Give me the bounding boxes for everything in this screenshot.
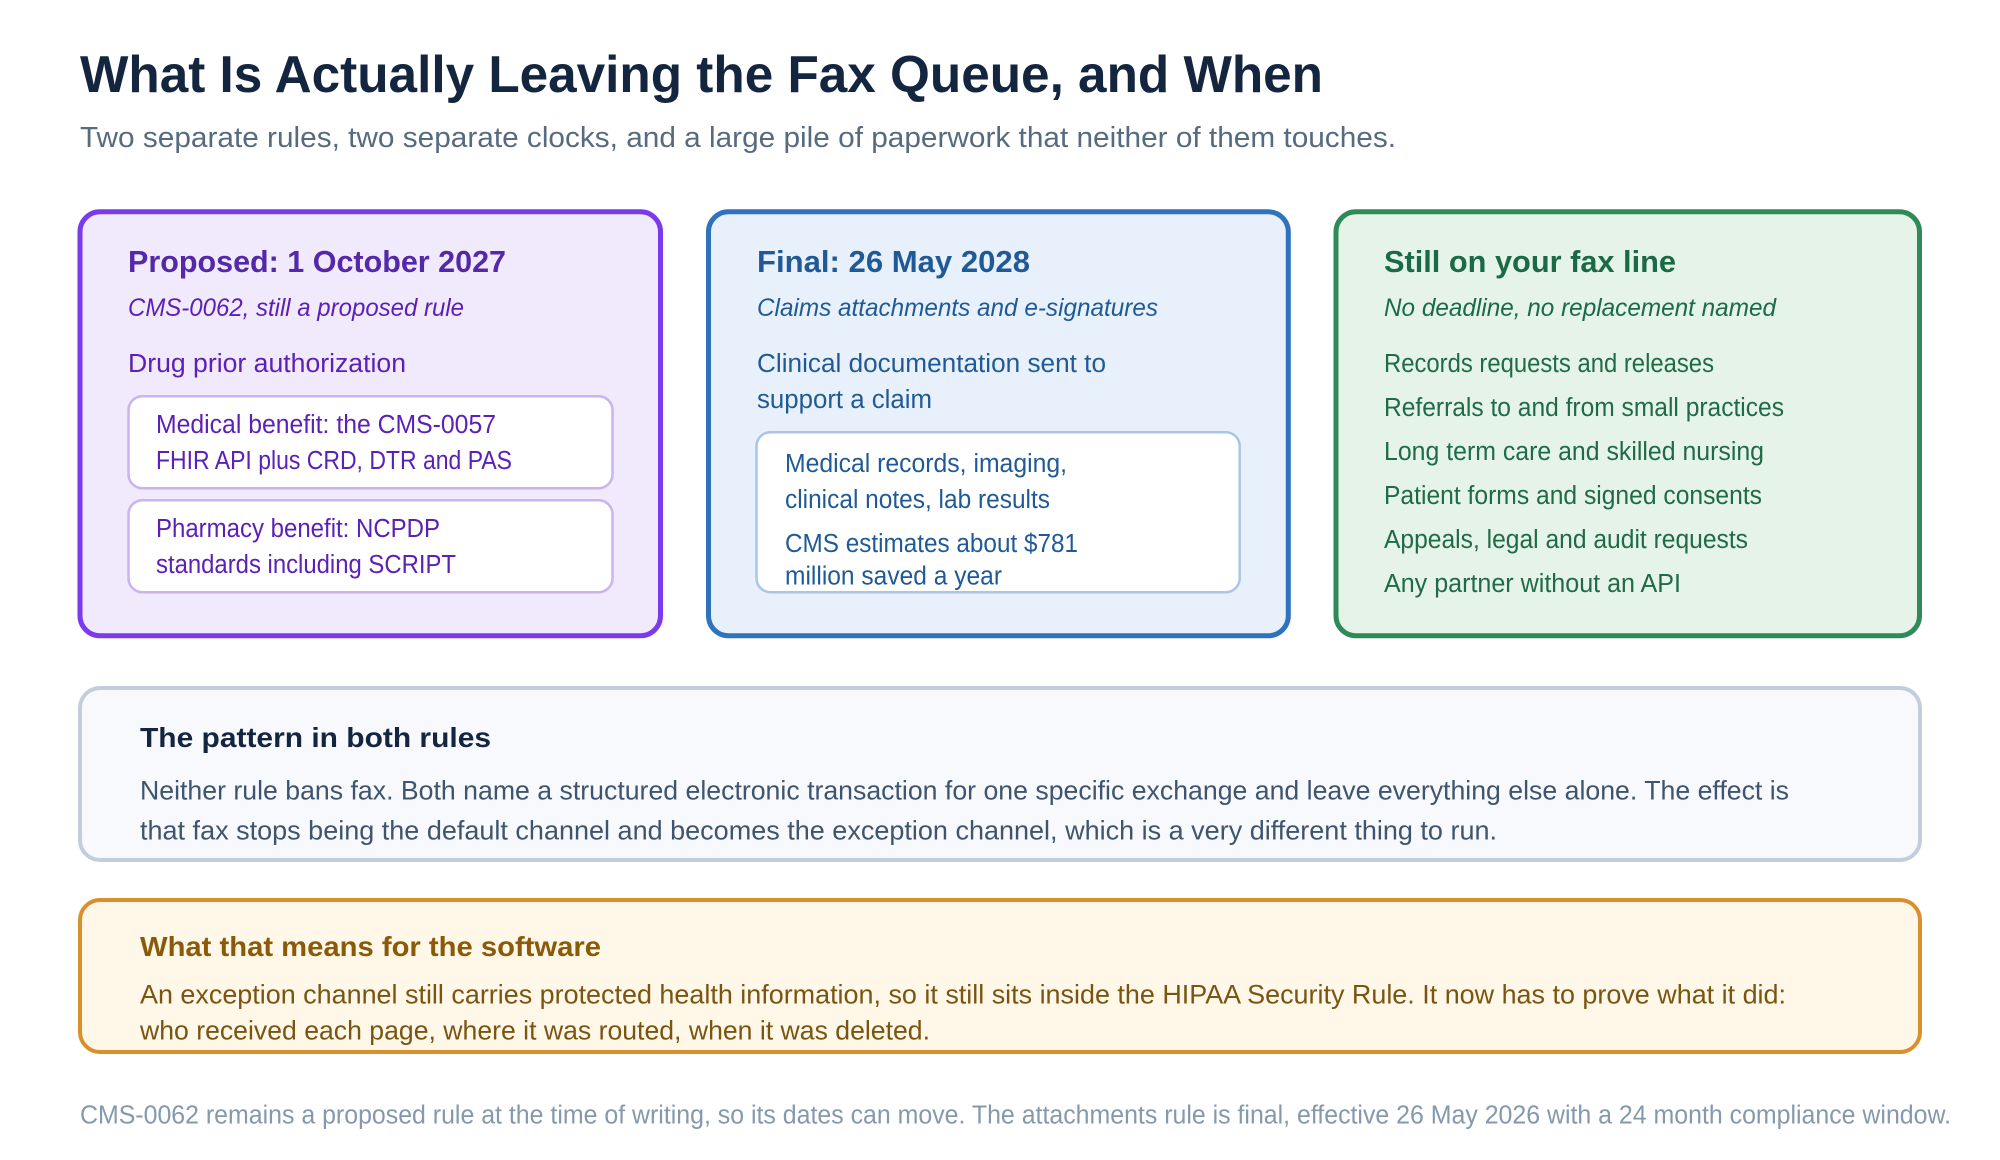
footnote: CMS-0062 remains a proposed rule at the time of writing, so its dates can move. The attachments rule is final, effective 26 May 2026 with a 24 month compliance window. <box>80 1102 1951 1130</box>
subtitle: Two separate rules, two separate clocks, and a large pile of paperwork that neither of them touches. <box>80 122 1396 154</box>
text: scope: Drug prior authorization <box>128 350 406 378</box>
box: medical benefit <box>128 396 612 488</box>
text: software body: An exception channel still carries protected health information, so it still sits inside the HIPAA Security Rule. It now has to prove what it did: <box>140 980 1786 1010</box>
list: remaining fax uses: Referrals to and from small practices <box>1384 394 1784 422</box>
panel: still on fax <box>1336 212 1920 636</box>
box: records and savings: CMS estimates about $781 <box>785 530 1078 558</box>
list: remaining fax uses <box>1384 350 1784 598</box>
subheading: no deadline: No deadline, no replacement named <box>1384 294 1777 322</box>
box: medical benefit: FHIR API plus CRD, DTR and PAS <box>156 447 512 475</box>
subheading: final rule: Claims attachments and e-signatures <box>757 294 1158 322</box>
box: pharmacy benefit: standards including SCRIPT <box>156 551 456 579</box>
text: pattern body: Neither rule bans fax. Both name a structured electronic transaction for one specific exchange and leave everything else alone. The effect is <box>140 776 1789 806</box>
heading: final date: Final: 26 May 2028 <box>757 245 1030 279</box>
box: records and savings <box>756 432 1240 592</box>
list: remaining fax uses: Records requests and releases <box>1384 350 1714 378</box>
heading: still on fax: Still on your fax line <box>1384 245 1676 279</box>
panel: what that means for the software <box>80 900 1920 1052</box>
box: pharmacy benefit: Pharmacy benefit: NCPDP <box>156 515 440 543</box>
box: records and savings: clinical notes, lab results <box>785 486 1050 514</box>
list: remaining fax uses: Any partner without an API <box>1384 570 1681 598</box>
text: pattern body <box>140 776 1789 846</box>
text: final scope: Clinical documentation sent to <box>757 350 1106 378</box>
text: final scope: support a claim <box>757 386 932 414</box>
panel: proposed rule <box>80 212 660 636</box>
text: final scope <box>757 350 1106 414</box>
box: pharmacy benefit <box>128 500 612 592</box>
list: remaining fax uses: Patient forms and signed consents <box>1384 482 1762 510</box>
text: software body: who received each page, where it was routed, when it was deleted. <box>139 1016 930 1046</box>
list: remaining fax uses: Long term care and skilled nursing <box>1384 438 1764 466</box>
heading: proposed date: Proposed: 1 October 2027 <box>128 245 506 279</box>
text: pattern body: that fax stops being the default channel and becomes the exception channel, which is a very different thing to run. <box>140 816 1497 846</box>
text: software body <box>139 980 1786 1046</box>
heading: software: What that means for the software <box>140 931 601 962</box>
subheading: proposed rule: CMS-0062, still a proposed rule <box>128 294 464 322</box>
panel: final rule <box>708 212 1288 636</box>
box: records and savings: Medical records, imaging, <box>785 450 1067 478</box>
list: remaining fax uses: Appeals, legal and audit requests <box>1384 526 1748 554</box>
panel: the pattern in both rules <box>80 688 1920 860</box>
box: medical benefit: Medical benefit: the CMS-0057 <box>156 411 496 439</box>
title: What Is Actually Leaving the Fax Queue, and When <box>80 46 1323 104</box>
heading: pattern: The pattern in both rules <box>140 722 491 753</box>
box: records and savings: million saved a year <box>785 562 1002 590</box>
